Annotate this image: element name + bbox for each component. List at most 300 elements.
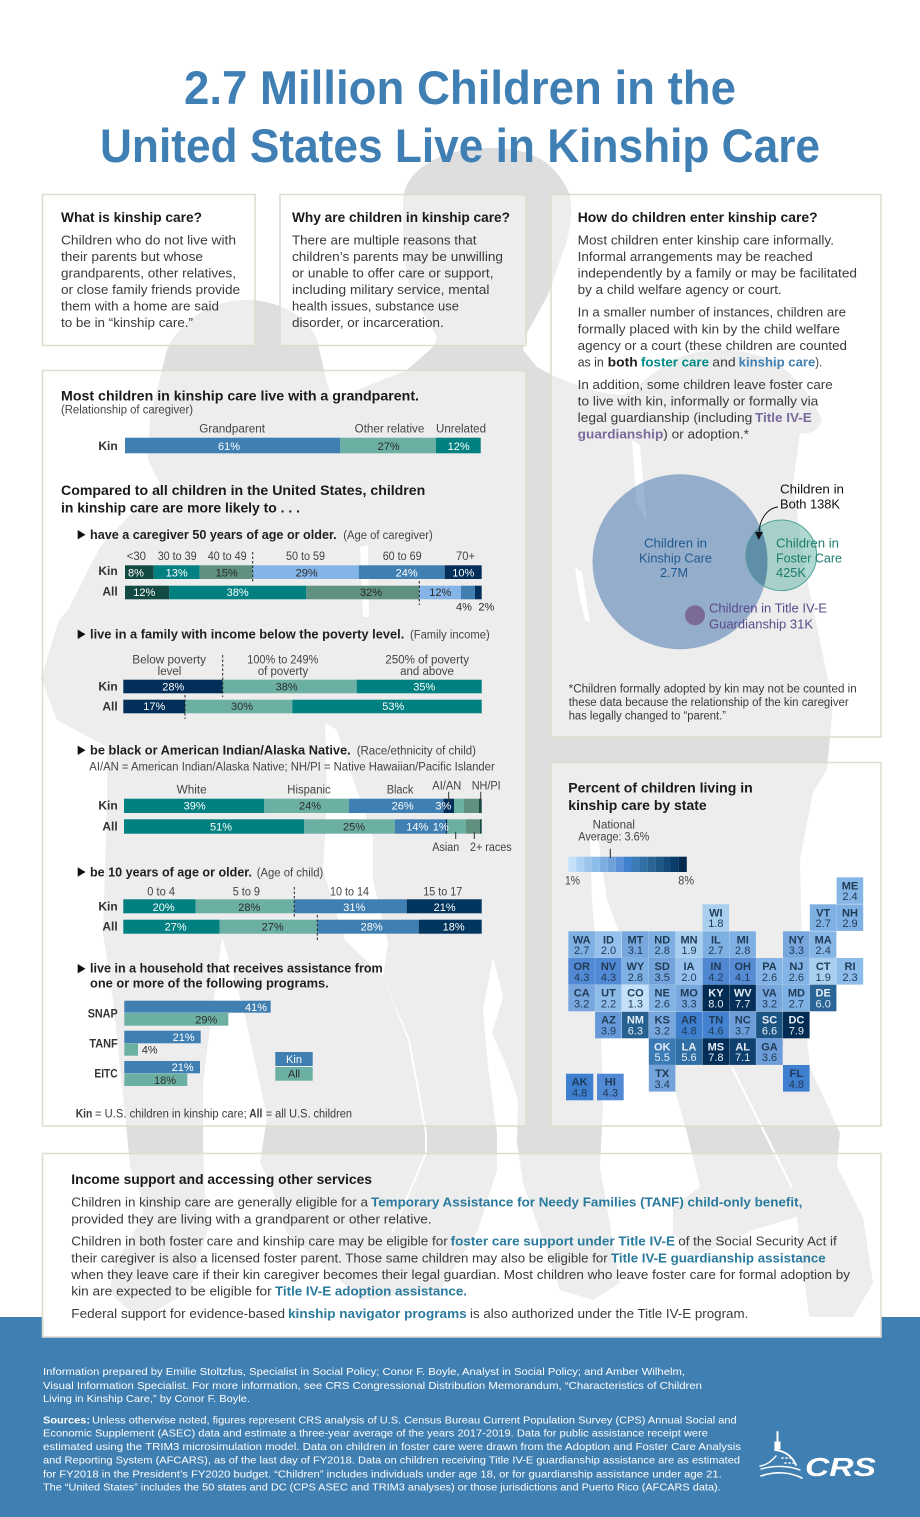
tiles: row 5: 1.3 (628, 998, 643, 1010)
bar chart: relationship of caregiver: Kin (98, 439, 118, 453)
tiles: row 2: 2.9 (842, 918, 858, 930)
heading: what is kinship care: What is kinship care? (61, 209, 202, 225)
text block: title IV-E: when they leave care if their kin caregiver becomes their legal guardian. Most children who leave foster care for formal adoption by (70, 1267, 851, 1282)
text block: definition: grandparents, other relatives, (61, 266, 236, 281)
bullet: race and ethnicity: (Race/ethnicity of child) (357, 746, 476, 758)
tiles: row 7: LA (682, 1041, 696, 1053)
title: 2.7 Million Children in the (184, 61, 736, 114)
tiles: row 6: KS (655, 1015, 670, 1027)
bullet: family income: live in a family with income below the poverty level. (90, 627, 404, 642)
tiles: row 8: FL (790, 1068, 803, 1080)
bar chart: age of caregiver: All (102, 585, 118, 599)
text block: title IV-E: Children in both foster care and kinship care may be eligible for (71, 1234, 448, 1249)
tiles: row 4: 4.2 (708, 972, 724, 984)
tiles: row 6: 6.3 (628, 1026, 643, 1038)
text block: definition: Children who do not live with (61, 232, 236, 247)
tiles: row 8: AK (572, 1077, 588, 1089)
heading: how: How do children enter kinship care? (578, 209, 818, 225)
tiles: row 3 (568, 931, 836, 958)
tiles: row 5: UT (601, 988, 616, 1000)
text block: formal placement: agency or a court (these children are counted (578, 338, 847, 353)
bar chart: family income: 250% of poverty (385, 654, 469, 666)
bar chart: age of child: 20% (153, 902, 175, 914)
tiles: row 6: 6.6 (762, 1026, 777, 1038)
bar chart: assistance programs: 4% (142, 1045, 158, 1057)
tiles: row 2: VT (816, 907, 831, 919)
label: kinship care: Children in (644, 535, 707, 550)
tiles: row 5: CO (627, 988, 644, 1000)
sources: Unless otherwise noted, figures represent CRS analysis of U.S. Census Bureau Current Population Survey (CPS) Annual Social and (92, 1414, 737, 1426)
bullet: age of caregiver: have a caregiver 50 years of age or older. (90, 527, 337, 542)
tiles: row 3: 3.3 (789, 945, 804, 957)
bullet: race and ethnicity (78, 743, 495, 773)
circle: foster care (746, 520, 817, 591)
text block: kinship navigator: kinship navigator programs (288, 1306, 467, 1321)
wordmark: CRS: CRS (805, 1452, 877, 1482)
bar chart: age of child: All (102, 920, 118, 934)
tiles: row 4: 2.0 (681, 972, 697, 984)
tiles: row 6: 3.2 (655, 1026, 670, 1038)
tiles: row 4: 4.3 (574, 972, 589, 984)
tiles: row 3: 2.0 (601, 945, 616, 957)
bar chart: age of caregiver: 4% (456, 602, 472, 614)
bar chart: family income: 28% (162, 681, 185, 693)
bar chart: age of child: 0 to 4 (147, 886, 176, 898)
tiles: row 2 (702, 904, 863, 931)
bar chart: assistance programs: 18% (154, 1075, 176, 1087)
bar chart: age of child: 31% (343, 902, 366, 914)
tiles: row 3: 2.7 (574, 945, 589, 957)
note: kin and all definitions: Kin (76, 1108, 92, 1120)
bar chart: race and ethnicity: Kin (98, 799, 118, 813)
text block: TANF: Temporary Assistance for Needy Families (TANF) child-only benefit, (371, 1195, 802, 1210)
bar chart: family income: Kin (98, 680, 118, 694)
sources: estimated using the TRIM3 microsimulation model. Data on children in foster care were drawn from the Adoption and Foster Care Analysis (43, 1441, 741, 1453)
text block: title IV-E: of the Social Security Act if (678, 1234, 837, 1249)
tiles: row 5: 7.7 (735, 998, 750, 1010)
panel: income support (42, 1154, 881, 1337)
bar chart: age of caregiver: 40 to 49 (208, 551, 247, 563)
tiles: row 3: MA (815, 934, 832, 946)
tiles: row 3: MT (627, 934, 644, 946)
bullet: race and ethnicity: be black or American Indian/Alaska Native. (90, 743, 351, 758)
sources: and Reporting System (AFCARS), as of the last day of FY2018. Data on children receiving Title IV-E guardianship assistance are as estimated (43, 1455, 740, 1467)
bar chart: race and ethnicity: All (102, 819, 118, 833)
sources (43, 1414, 741, 1494)
text block: kinship navigator: Federal support for evidence-based (71, 1306, 285, 1321)
text block: informal entry: Informal arrangements may be reached (578, 249, 813, 264)
tiles: row 5: 3.2 (762, 998, 777, 1010)
tiles: row 5: 6.0 (816, 998, 831, 1010)
bar chart: age of child: 27% (165, 921, 187, 933)
bullet: assistance programs: one or more of the following programs. (90, 975, 329, 990)
bar chart: age of caregiver: 13% (166, 567, 188, 579)
tiles: row 4: NJ (789, 961, 803, 973)
text block: definition (61, 232, 240, 330)
bar chart: assistance programs: EITC (94, 1067, 118, 1081)
tiles: row 5: MD (788, 988, 805, 1000)
tiles: row 4 (568, 958, 863, 985)
tiles: row 4: 1.9 (816, 972, 831, 984)
tiles: row 7: 7.8 (708, 1052, 724, 1064)
tiles: row 3: 2.8 (735, 945, 750, 957)
legend: kin and all (275, 1052, 313, 1081)
footer band (0, 1317, 920, 1517)
heading: compared to all children: Compared to all children in the United States, children (61, 482, 425, 498)
bar chart: race and ethnicity: Black (387, 785, 414, 797)
bar chart: age of caregiver: 12% (429, 587, 452, 599)
tiles: row 4: OR (573, 961, 590, 973)
bar chart: assistance programs: 41% (245, 1002, 267, 1014)
bar chart: family income: 53% (382, 701, 405, 713)
tiles: row 3: ND (654, 934, 670, 946)
arrow: children in both (755, 507, 778, 540)
bar chart: age of caregiver: <30 (127, 551, 146, 563)
panel: why are children in kinship care (280, 194, 526, 346)
tiles: row 4: 2.3 (842, 972, 858, 984)
panel: state map (551, 762, 881, 1126)
tiles: row 7: GA (761, 1041, 778, 1053)
tiles: row 8: 3.4 (655, 1079, 670, 1091)
tiles: row 3: NY (789, 934, 805, 946)
tiles: row 5: MO (680, 988, 698, 1000)
bar chart: family income: 30% (231, 701, 253, 713)
logo: CRS (760, 1432, 877, 1482)
label: guardianship: Children in Title IV-E (709, 601, 827, 616)
tiles: row 4: IN (710, 961, 721, 973)
bar chart: race and ethnicity: White (177, 785, 207, 797)
tiles: row 3: 2.8 (655, 945, 670, 957)
footnote: adoption: has legally changed to “parent.” (569, 710, 726, 722)
heading: why: Why are children in kinship care? (292, 209, 510, 225)
bullet: age of child: (Age of child) (257, 867, 323, 879)
bullet: age of child (78, 864, 323, 879)
bullet: family income: (Family income) (410, 630, 490, 642)
tiles: row 5: CA (574, 988, 590, 1000)
bar chart: age of child: Kin (98, 900, 118, 914)
bar chart: race and ethnicity: Asian (432, 842, 459, 854)
tiles: row 7: 3.6 (762, 1052, 777, 1064)
text block: formal placement: both (608, 354, 638, 369)
label: foster care (776, 535, 842, 580)
tiles: row 6: 4.6 (708, 1026, 724, 1038)
color scale legend: National (593, 819, 635, 831)
legend: kin and all: All (288, 1068, 300, 1080)
tiles: row 6: DC (788, 1015, 804, 1027)
tiles: row 4: SD (655, 961, 670, 973)
bar chart: relationship of caregiver: Other relative (355, 424, 424, 436)
text block: title IV-E: kin are expected to be eligible for (71, 1283, 272, 1298)
bar chart: race and ethnicity: 24% (299, 800, 321, 812)
bar chart: age of child: 28% (361, 921, 383, 933)
label: guardianship (709, 601, 827, 631)
tiles: row 3: WA (573, 934, 591, 946)
sources: The “United States” includes the 50 states and DC (CPS ASEC and TRIM3 analyses) or those jurisdictions and Puerto Rico (AFCARS data). (43, 1482, 721, 1494)
bar chart: relationship of caregiver: 61% (218, 441, 240, 453)
bar chart: relationship of caregiver: Grandparent (199, 424, 266, 436)
tiles: row 8: 4.8 (572, 1088, 587, 1100)
label: children in both (780, 481, 844, 511)
bar chart: age of caregiver: 30 to 39 (158, 551, 197, 563)
bar chart: family income: level (158, 666, 181, 678)
tiles: row 4: RI (844, 961, 856, 973)
color scale legend (565, 819, 694, 887)
credits: Living in Kinship Care,” by Conor F. Boyle. (43, 1393, 250, 1405)
note: kin and all definitions: All (249, 1108, 262, 1120)
tiles: row 5: NE (655, 988, 670, 1000)
text block: leaving foster care: guardianship (578, 426, 663, 441)
label: kinship care (639, 535, 712, 580)
tiles: row 7: 7.1 (735, 1052, 750, 1064)
tiles: row 4: 4.3 (601, 972, 616, 984)
bar chart: age of caregiver: 10% (452, 567, 475, 579)
bar chart: relationship of caregiver: Unrelated (436, 424, 486, 436)
venn diagram (592, 474, 844, 649)
bar chart: family income: 38% (276, 681, 298, 693)
bar chart: race and ethnicity: 26% (392, 800, 414, 812)
credits: Visual Information Specialist. For more information, see CRS Congressional Distribution Memorandum, “Characteristics of Children (43, 1380, 702, 1392)
bullet: race and ethnicity: AI/AN = American Indian/Alaska Native; NH/PI = Native Hawaiian/Pacific Islander (89, 761, 495, 773)
tiles: row 5: 3.2 (574, 998, 589, 1010)
bar chart: age of caregiver: 32% (360, 587, 382, 599)
tiles: row 7: AL (735, 1041, 750, 1053)
bar chart: assistance programs: 21% (173, 1032, 195, 1044)
bar chart: age of child: 28% (238, 902, 261, 914)
tiles: row 3: ID (603, 934, 614, 946)
tiles: row 7: 5.5 (655, 1052, 670, 1064)
text block: formal placement: formally placed with kin by the child welfare (578, 321, 840, 336)
text block: definition: or close family friends provide (61, 282, 240, 297)
sources: Sources: (43, 1414, 90, 1426)
tiles: row 1 (837, 877, 863, 904)
text block: reasons: disorder, or incarceration. (292, 315, 444, 330)
label: foster care: Children in (776, 535, 839, 550)
text block: formal placement: and (712, 354, 736, 369)
bar chart: age of child: 21% (434, 902, 456, 914)
bar chart: race and ethnicity: 14% (406, 821, 429, 833)
bar chart: race and ethnicity: Hispanic (287, 785, 331, 797)
text block: reasons: or unable to offer care or support, (292, 266, 494, 281)
text block: formal placement (578, 305, 847, 369)
bar chart: race and ethnicity (98, 781, 512, 854)
heading: income support: Income support and accessing other services (71, 1171, 372, 1187)
bar chart: age of child: 15 to 17 (423, 886, 462, 898)
bar chart: race and ethnicity: 39% (184, 800, 206, 812)
bar chart: family income: 35% (413, 681, 436, 693)
text block: informal entry: independently by a family or may be facilitated (578, 266, 857, 281)
text block: reasons (292, 232, 503, 330)
tiles: row 7: MS (708, 1041, 724, 1053)
tiles: row 6: 3.7 (735, 1026, 750, 1038)
bar chart: race and ethnicity: NH/PI (472, 781, 501, 793)
tiles: row 4: CT (816, 961, 831, 973)
text block: TANF: Children in kinship care are generally eligible for a (71, 1195, 369, 1210)
bar chart: race and ethnicity: 51% (210, 821, 232, 833)
panel: how do children enter kinship care (551, 194, 881, 737)
color scale legend: 8% (678, 875, 694, 887)
tiles: row 5: 2.2 (601, 998, 616, 1010)
footnote: adoption: these data because the relationship of the kin caregiver (569, 697, 849, 709)
tiles: row 3: 1.9 (681, 945, 697, 957)
tiles: row 5: 3.3 (681, 998, 697, 1010)
tiles: row 6: 4.8 (681, 1026, 697, 1038)
label: guardianship: Guardianship 31K (709, 616, 813, 631)
tiles: row 4: PA (762, 961, 777, 973)
tiles: row 3: MI (737, 934, 749, 946)
tiles: row 4: IA (684, 961, 695, 973)
text block: formal placement: ). (815, 354, 822, 369)
tiles: row 5: WV (734, 988, 752, 1000)
tiles: row 4: 4.1 (735, 972, 750, 984)
bar chart: age of child: 18% (443, 921, 465, 933)
title (100, 61, 820, 172)
color scale legend: Average: 3.6% (578, 831, 649, 843)
text block: definition: to be in “kinship care.” (61, 315, 193, 330)
legend: kin and all: Kin (286, 1054, 302, 1066)
dot: title IV-E guardianship (685, 605, 705, 625)
note: kin and all definitions: = U.S. children in kinship care; (95, 1108, 247, 1120)
bar chart: age of caregiver: 12% (133, 587, 156, 599)
bar chart: relationship of caregiver: 12% (448, 441, 470, 453)
heading: compared to all children: in kinship care are more likely to . . . (61, 499, 300, 515)
bar chart: race and ethnicity: 2+ races (470, 842, 512, 854)
text block: reasons: health issues, substance use (292, 299, 459, 314)
tiles: row 6 (595, 1012, 810, 1038)
text block: title IV-E: Title IV-E adoption assistance. (275, 1283, 467, 1298)
bar chart: age of caregiver: 38% (227, 587, 249, 599)
bar chart: assistance programs: 29% (195, 1015, 218, 1027)
text block: leaving foster care: legal guardianship (including (578, 410, 752, 425)
tiles: row 7 (649, 1038, 783, 1065)
bar chart: family income: of poverty (258, 666, 308, 678)
heading: state map (568, 780, 753, 813)
tiles: row 8 (566, 1065, 810, 1100)
bar chart: family income: 17% (143, 701, 166, 713)
heading: compared to all children (61, 482, 425, 515)
sources: Economic Supplement (ASEC) data and estimate a three-year average of the years 2017-2019. Data for public assistance receipt were (43, 1428, 708, 1440)
tiles: row 1: ME (842, 880, 858, 892)
text block: TANF (71, 1195, 802, 1226)
bar chart: age of caregiver: 60 to 69 (383, 551, 422, 563)
text block: reasons: There are multiple reasons that (292, 232, 477, 247)
sources: for FY2018 in the President’s FY2020 budget. “Children” includes individuals under age 18, or for guardianship assistance under age 21. (43, 1468, 722, 1480)
heading: state map: Percent of children living in (568, 780, 753, 796)
text block: formal placement: kinship care (739, 354, 815, 369)
tiles: row 6: 7.9 (789, 1026, 804, 1038)
color scale legend: 1% (565, 875, 580, 887)
tiles: row 2: NH (842, 907, 858, 919)
label: kinship care: 2.7M (660, 565, 688, 580)
bar chart: race and ethnicity: 3% (435, 800, 451, 812)
text block: informal entry: by a child welfare agency or court. (578, 282, 782, 297)
bar chart: age of caregiver (98, 551, 494, 614)
bar chart: age of caregiver: 70+ (456, 551, 475, 563)
bar chart: assistance programs: SNAP (88, 1006, 118, 1020)
tiles: row 5: 2.7 (789, 998, 804, 1010)
tiles: row 5: VA (762, 988, 777, 1000)
text block: title IV-E: their caregiver is also a licensed foster parent. Those same children may also be eligible for (71, 1250, 608, 1265)
text block: leaving foster care: In addition, some children leave foster care (578, 377, 833, 392)
subheading: relationship of caregiver: (Relationship of caregiver) (61, 405, 193, 417)
text block: TANF: provided they are living with a grandparent or other relative. (71, 1211, 432, 1226)
tiles: row 5: KY (708, 988, 724, 1000)
text block: leaving foster care: to live with kin, informally or formally via (578, 393, 819, 408)
bar chart: age of caregiver: 8% (128, 567, 144, 579)
text block: title IV-E: Title IV-E guardianship assistance (611, 1250, 826, 1265)
bar chart: age of caregiver: 29% (296, 567, 318, 579)
tiles: row 8: TX (655, 1068, 670, 1080)
tiles: row 6: AZ (601, 1015, 616, 1027)
bar chart: age of caregiver: 50 to 59 (286, 551, 325, 563)
tiles: row 7: 5.6 (681, 1052, 697, 1064)
tiles: row 4: 2.6 (762, 972, 777, 984)
label: kinship care: Kinship Care (639, 550, 712, 565)
text block: reasons: children’s parents may be unwilling (292, 249, 503, 264)
bar chart: age of caregiver: 15% (216, 567, 238, 579)
tiles: row 5: DE (816, 988, 831, 1000)
bar chart: age of child: 5 to 9 (233, 886, 260, 898)
text block: title IV-E (70, 1234, 851, 1298)
text block: formal placement: foster care (641, 354, 709, 369)
tiles: row 2: 1.8 (708, 918, 724, 930)
tiles: row 6: NM (627, 1015, 644, 1027)
bar chart: family income: 100% to 249% (247, 654, 318, 666)
bar chart: age of caregiver: 24% (396, 567, 418, 579)
tiles: row 6: TN (709, 1015, 723, 1027)
tiles: row 8: 4.3 (603, 1088, 618, 1100)
text block: definition: their parents but whose (61, 249, 203, 264)
bar chart: relationship of caregiver: 27% (378, 441, 400, 453)
credits: Information prepared by Emilie Stoltzfus, Specialist in Social Policy; Conor F. Boyle, Analyst in Social Policy; and Amber Wilhelm, (43, 1366, 685, 1378)
tiles: row 6: NC (735, 1015, 751, 1027)
tiles: row 5: 8.0 (708, 998, 724, 1010)
bar chart: race and ethnicity: AI/AN (432, 781, 461, 793)
tiles: row 4: WY (627, 961, 645, 973)
text block: formal placement: as in (578, 354, 604, 369)
tiles: row 2: 2.7 (816, 918, 831, 930)
tiles: row 3: 2.7 (708, 945, 724, 957)
tiles: row 2: WI (709, 907, 723, 919)
text block: title IV-E: foster care support under Title IV-E (451, 1234, 675, 1249)
bar chart: family income (98, 654, 482, 719)
label: children in both: Both 138K (780, 496, 840, 511)
label: foster care: Foster Care (776, 550, 842, 565)
bar chart: assistance programs: TANF (89, 1036, 118, 1050)
label: children in both: Children in (780, 481, 844, 496)
bar chart: age of child (98, 886, 482, 940)
panel: charts (42, 370, 526, 1126)
bullet: assistance programs: live in a household that receives assistance from (90, 960, 383, 975)
footnote: adoption (569, 684, 857, 722)
bar chart: relationship of caregiver (98, 424, 486, 453)
circle: kinship care (592, 474, 768, 649)
tiles: row 8: 4.8 (789, 1079, 804, 1091)
text block: definition: them with a home are said (61, 299, 219, 314)
tile grid map (566, 877, 863, 1100)
text block: reasons: including military service, mental (292, 282, 490, 297)
tiles: row 5 (568, 985, 836, 1011)
bar chart: family income: All (102, 700, 118, 714)
bar chart: age of caregiver: 2% (478, 602, 494, 614)
title: United States Live in Kinship Care (100, 119, 820, 172)
note: kin and all definitions: = all U.S. children (266, 1108, 352, 1120)
tiles: row 1: 2.4 (842, 891, 858, 903)
bullet: age of caregiver: (Age of caregiver) (343, 530, 433, 542)
bar chart: age of child: 27% (262, 921, 284, 933)
tiles: row 3: 3.1 (628, 945, 643, 957)
text block: leaving foster care (578, 377, 833, 441)
bar chart: family income: and above (400, 666, 454, 678)
